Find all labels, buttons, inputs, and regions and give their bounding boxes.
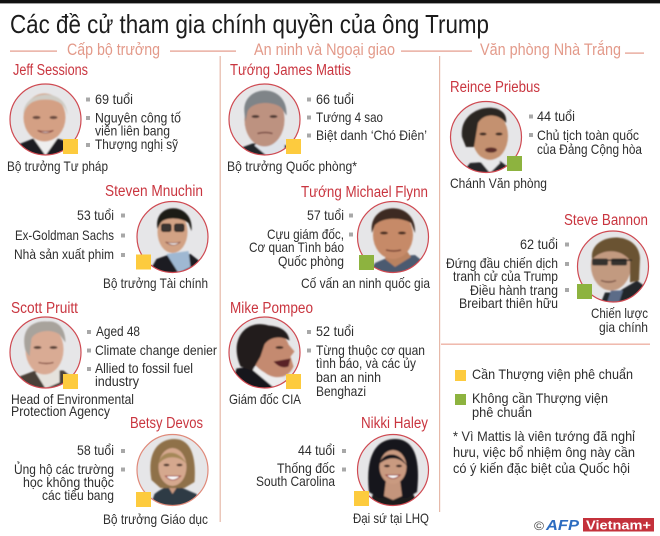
footnote: hưu, việc bổ nhiệm ông này cần	[453, 445, 635, 460]
facts	[14, 208, 125, 262]
facts	[86, 92, 181, 152]
facts: Climate change denier	[95, 343, 217, 358]
role: Đại sứ tại LHQ	[353, 511, 429, 526]
facts: 53 tuổi	[77, 208, 114, 223]
facts: industry	[95, 374, 139, 389]
panel: James Mattis	[227, 62, 427, 174]
portrait	[358, 434, 428, 506]
facts	[87, 324, 217, 389]
source logos: AFP	[545, 517, 580, 534]
name: Tướng Michael Flynn	[301, 184, 428, 201]
facts: học không thuộc	[23, 475, 114, 490]
facts: 58 tuổi	[77, 443, 114, 458]
portrait	[137, 202, 208, 273]
legend label: no approval needed: Không cần Thượng viện	[472, 391, 608, 406]
legend swatch: green	[455, 394, 466, 405]
facts: tranh cử của Trump	[453, 269, 558, 284]
name: Tướng James Mattis	[230, 62, 351, 79]
role: Giám đốc CIA	[229, 392, 302, 407]
facts: Chủ tịch toàn quốc	[537, 128, 639, 143]
name: Betsy Devos	[130, 415, 203, 432]
role: gia chính	[599, 320, 648, 335]
facts	[307, 92, 427, 143]
facts: Ex-Goldman Sachs	[15, 228, 114, 243]
legend swatch: yellow	[455, 370, 466, 381]
facts: Quốc phòng	[278, 254, 344, 269]
role	[11, 392, 134, 419]
portrait	[137, 434, 208, 506]
role: Bộ trưởng Giáo dục	[103, 512, 208, 527]
facts: 62 tuổi	[520, 237, 558, 252]
facts: 69 tuổi	[95, 92, 133, 107]
role: Cố vấn an ninh quốc gia	[301, 276, 430, 291]
source logos: Vietnam+	[586, 518, 651, 532]
title: Các đề cử tham gia chính quyền của ông Trump	[10, 9, 489, 39]
facts: ban an ninh	[316, 370, 381, 385]
name: Jeff Sessions	[13, 62, 88, 79]
role: Chánh Văn phòng	[450, 176, 547, 191]
facts	[256, 443, 346, 489]
panel: Steven Mnuchin	[14, 183, 208, 291]
portrait	[450, 102, 522, 173]
facts: Tướng 4 sao	[316, 110, 383, 125]
facts: tình báo, và các ủy	[316, 356, 416, 371]
name: Nikki Haley	[361, 415, 428, 432]
approval badge	[286, 374, 301, 389]
name: Mike Pompeo	[230, 300, 313, 317]
facts: 57 tuổi	[307, 208, 344, 223]
facts: Từng thuộc cơ quan	[316, 343, 425, 358]
role: Protection Agency	[11, 404, 110, 419]
panel: Mike Pompeo	[229, 300, 425, 407]
facts: 66 tuổi	[316, 92, 354, 107]
footnote: * Vì Mattis là viên tướng đã nghỉ	[453, 429, 635, 444]
approval badge	[63, 374, 78, 389]
facts: Nhà sản xuất phim	[14, 247, 114, 262]
facts	[446, 237, 569, 311]
facts: Thống đốc	[277, 461, 335, 476]
role: Bộ trưởng Tài chính	[103, 276, 208, 291]
source logos: ©	[534, 519, 544, 533]
facts: Đứng đầu chiến dịch	[446, 256, 558, 271]
legend label: no approval needed	[472, 391, 608, 420]
facts: 44 tuổi	[537, 109, 575, 124]
facts: 52 tuổi	[316, 324, 354, 339]
role	[591, 306, 648, 335]
facts: Ủng hộ các trường	[14, 460, 114, 477]
facts: Benghazi	[316, 384, 366, 399]
approval badge	[286, 139, 301, 154]
legend	[455, 367, 633, 420]
heading: An ninh và Ngoại giao: An ninh và Ngoại giao	[254, 41, 395, 59]
facts	[307, 324, 425, 399]
legend label: no approval needed: phê chuẩn	[472, 405, 532, 420]
facts: viên liên bang	[95, 124, 170, 138]
facts: Nguyên công tố	[95, 110, 181, 126]
facts: Điều hành trang	[470, 283, 558, 298]
panel: Betsy Devos	[14, 415, 208, 527]
portrait	[229, 317, 300, 388]
panel: Scott Pruitt	[10, 300, 217, 419]
facts: 44 tuổi	[298, 443, 335, 458]
panel: Reince Priebus	[450, 79, 642, 191]
name: Scott Pruitt	[11, 300, 79, 317]
portrait	[578, 231, 648, 302]
facts	[14, 443, 125, 503]
facts	[529, 109, 642, 157]
facts: các tiểu bang	[42, 488, 114, 503]
portrait	[10, 317, 81, 388]
approval badge	[63, 139, 78, 154]
name: Reince Priebus	[450, 79, 540, 96]
approval badge	[359, 255, 374, 270]
facts: của Đảng Cộng hòa	[537, 142, 642, 157]
facts: Aged 48	[96, 324, 140, 339]
name: Steven Mnuchin	[105, 183, 203, 200]
footnote	[453, 429, 635, 476]
role: Head of Environmental	[11, 392, 134, 407]
heading: Văn phòng Nhà Trắng: Văn phòng Nhà Trắng	[480, 40, 621, 59]
facts: Cựu giám đốc,	[267, 227, 344, 242]
panel: Nikki Haley	[256, 415, 429, 526]
approval badge	[136, 254, 151, 270]
approval badge	[136, 492, 151, 507]
facts: Cơ quan Tình báo	[249, 240, 344, 255]
approval badge	[507, 156, 522, 171]
facts: Allied to fossil fuel	[95, 361, 193, 376]
facts: Thượng nghị sỹ	[95, 137, 178, 152]
role: Bộ trưởng Tư pháp	[7, 159, 108, 174]
role: Bộ trưởng Quốc phòng*	[227, 159, 358, 174]
role: Chiến lược	[591, 306, 648, 321]
facts: Biệt danh ‘Chó Điên’	[316, 128, 427, 143]
panel: Steve Bannon	[446, 212, 648, 335]
approval badge	[354, 491, 369, 506]
legend label: needs approval: Cần Thượng viện phê chuẩn	[472, 367, 633, 382]
name: Steve Bannon	[564, 212, 648, 229]
source logos	[534, 517, 654, 534]
facts: South Carolina	[256, 474, 335, 489]
facts	[249, 208, 353, 269]
facts: Breibart thiên hữu	[459, 296, 558, 311]
portrait	[358, 202, 428, 273]
footnote: có ý kiến đặc biệt của Quốc hội	[453, 461, 630, 476]
heading: Cấp bộ trưởng: Cấp bộ trưởng	[67, 41, 160, 59]
portrait	[10, 84, 81, 156]
panel: Jeff Sessions	[7, 62, 181, 174]
panel: Michael Flynn	[249, 184, 430, 291]
approval badge	[577, 284, 592, 299]
portrait	[229, 84, 300, 156]
